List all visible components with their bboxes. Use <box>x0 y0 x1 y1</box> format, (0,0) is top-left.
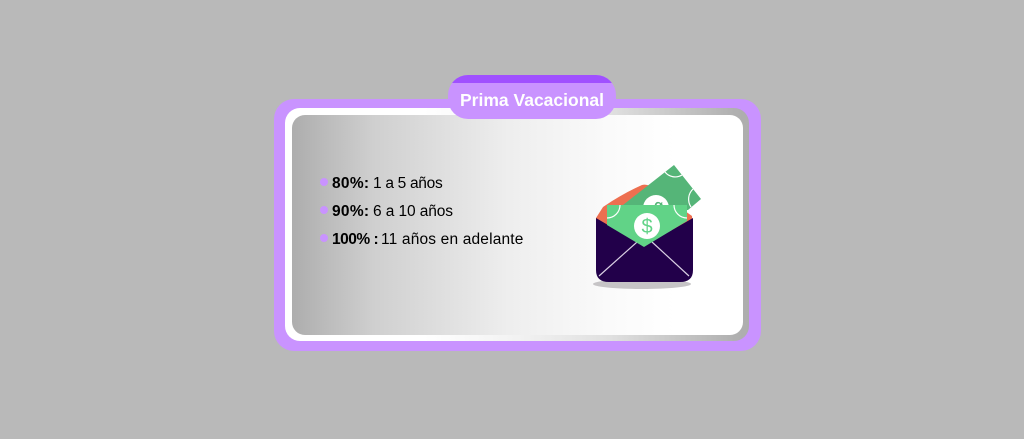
list item: 80%: 80%: <box>332 175 369 192</box>
heading tab: Prima Vacacional <box>448 75 616 119</box>
shadow <box>593 279 691 289</box>
heading text: Prima Vacacional <box>460 90 604 110</box>
list item: 100%: 11 años en adelante <box>381 231 524 248</box>
icon: envelope with money <box>593 165 701 289</box>
list item: 90% <box>320 203 453 220</box>
back banknote <box>620 165 701 221</box>
list item: 80% <box>320 175 442 192</box>
panel: gradient content card <box>292 115 743 335</box>
panel: inner ring <box>285 108 749 341</box>
panel: outer purple frame <box>274 99 761 351</box>
envelope fold lines <box>599 242 689 276</box>
envelope body <box>596 218 693 282</box>
list item: 100%: 100% : <box>332 231 378 248</box>
list item: 90%: 90%: <box>332 203 369 220</box>
envelope back flap <box>596 185 693 230</box>
list item: 80%: 1 a 5 años <box>373 175 442 192</box>
list item: 90%: 6 a 10 años <box>373 203 453 220</box>
back banknote: $ <box>646 197 668 221</box>
dollar sign: $ <box>641 216 653 238</box>
front banknote <box>607 205 687 247</box>
